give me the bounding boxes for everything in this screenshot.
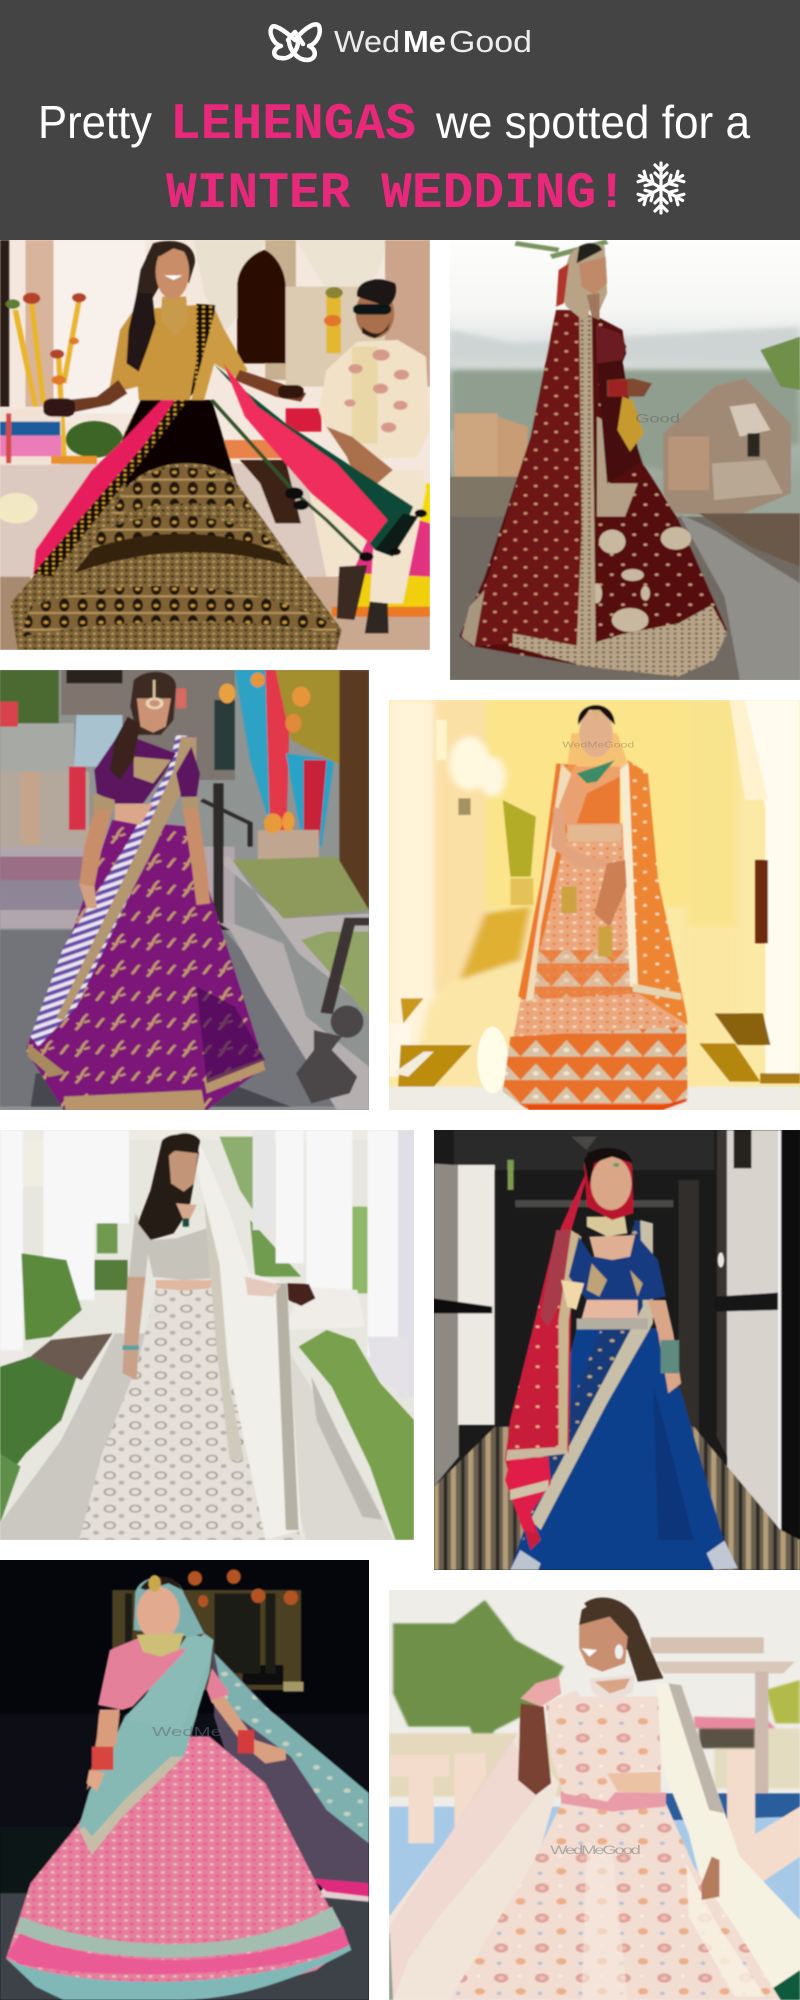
photo: orange lehenga in a yellow corridor [389, 700, 800, 1110]
title line one: Pretty [38, 96, 152, 148]
ruin wall [663, 378, 791, 517]
photo: pink lehenga with teal dupatta [0, 1560, 369, 2000]
title line two: WINTER WEDDING! [166, 166, 627, 223]
lehenga [459, 310, 727, 677]
skirt [10, 400, 342, 650]
ground [450, 517, 800, 680]
gold tassel [617, 397, 644, 452]
dupatta [628, 760, 688, 1025]
hair and head [584, 1597, 663, 1682]
arm and hand [607, 378, 652, 397]
floor patches [398, 1045, 472, 1087]
chandelier lights [188, 1569, 298, 1607]
dark skirt shadow [196, 987, 265, 1083]
drape and blouse [577, 1697, 661, 1773]
blouse [559, 767, 620, 827]
head [584, 1148, 634, 1220]
photo: ivory lehenga in a colonnade [0, 1130, 414, 1540]
green and pink dupatta right [213, 363, 413, 557]
blouse [129, 1213, 210, 1280]
flower stands [15, 300, 79, 457]
statue [296, 1006, 363, 1103]
neck and head [566, 733, 628, 788]
dupatta over head and face [559, 244, 607, 323]
dupatta [31, 735, 196, 1047]
hair, head [138, 1135, 199, 1240]
skirt [449, 1803, 781, 2000]
pool [389, 1807, 800, 1933]
hem border [513, 605, 727, 677]
waist belt [560, 1792, 666, 1812]
plant [66, 421, 123, 458]
blouse [94, 735, 176, 803]
photo: maroon velvet lehenga on a fort [450, 240, 800, 680]
grass bottom [389, 1933, 800, 2000]
skirt [6, 1737, 350, 2000]
red dupatta [505, 1160, 592, 1550]
blouse [98, 1638, 186, 1710]
watermark: WedMe [152, 1724, 222, 1739]
arms [87, 1709, 120, 1790]
photo: purple lehenga in a garden [0, 670, 369, 1110]
watermark: WedMeGood [562, 741, 634, 750]
necklace [587, 1217, 627, 1237]
head and hair [130, 672, 176, 735]
trailing dupatta [212, 1650, 369, 1883]
arms [518, 1703, 551, 1795]
veil, head, necklace [134, 1577, 204, 1637]
photo: royal blue lehenga in a hallway [434, 1130, 800, 1570]
front teal drape [79, 1633, 213, 1855]
pink dupatta left [33, 377, 196, 575]
header banner [0, 0, 800, 240]
groom [306, 279, 430, 633]
necklace [589, 1675, 635, 1703]
dupatta border [577, 307, 596, 653]
skirt motifs [592, 527, 691, 632]
carpet [434, 1427, 800, 1570]
photo: pastel floral lehenga by a pool [389, 1590, 800, 2000]
blouse and body [110, 305, 196, 400]
skirt [510, 1328, 737, 1570]
skirt [79, 1290, 301, 1540]
railings [202, 783, 369, 1013]
letters [389, 1750, 800, 1950]
head and hair [135, 241, 195, 302]
icon: snowflake [636, 163, 686, 213]
title line one: LEHENGAS [170, 97, 416, 154]
photo: black and gold lehenga with groom [0, 240, 430, 650]
logo wordmark: Me [403, 24, 446, 59]
columns [0, 1130, 414, 1397]
veil [189, 1133, 301, 1540]
logo wordmark: Wed [334, 24, 400, 59]
blouse [569, 1237, 666, 1300]
left dupatta [389, 1730, 559, 2000]
right dupatta [656, 1683, 800, 1997]
colourful seat [337, 483, 430, 617]
arms [551, 807, 615, 870]
icon: WedMeGood logo [271, 25, 320, 60]
blue dupatta [523, 1220, 653, 1543]
title line one: we spotted for a [435, 96, 750, 148]
necklace [161, 297, 188, 337]
watermark: WedMeGood [550, 1844, 641, 1857]
stool [0, 408, 61, 465]
path [0, 1333, 265, 1540]
watermark: Good [635, 413, 680, 426]
tree and background [389, 1600, 800, 1797]
plants [21, 1253, 82, 1340]
logo wordmark: Good [449, 24, 532, 59]
walls [434, 1163, 459, 1487]
skirt [503, 823, 688, 1108]
lehenga skirt [26, 820, 265, 1110]
